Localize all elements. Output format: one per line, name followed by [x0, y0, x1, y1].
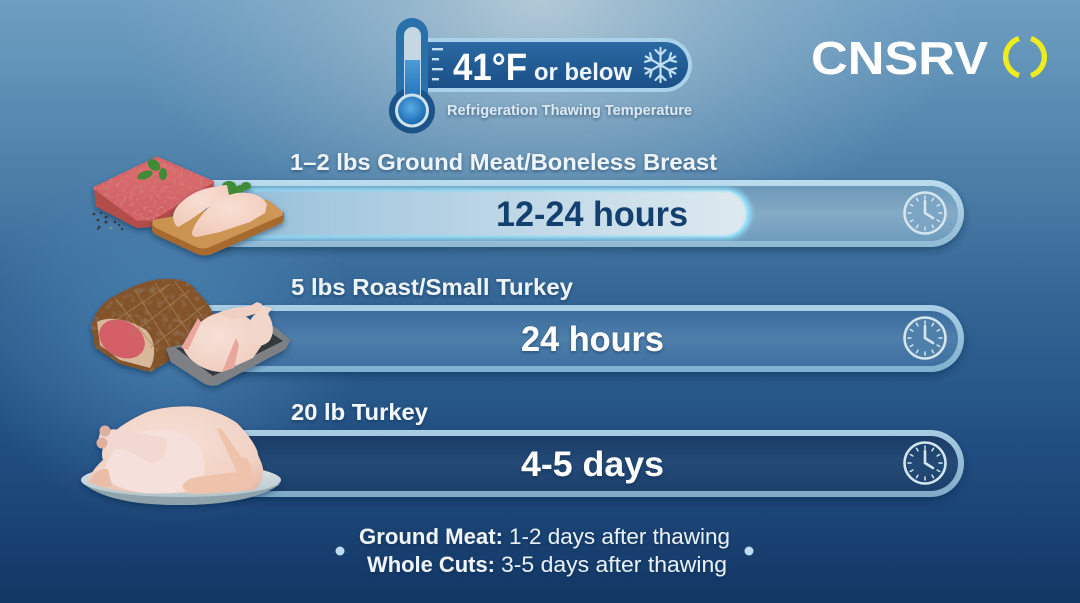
- icon: clock: [904, 442, 946, 484]
- temperature value: 41°F: [453, 47, 527, 89]
- note line 2: 3-5 days after thawing: [501, 552, 727, 577]
- chicken breasts: [173, 185, 229, 227]
- row 3 time bar: [235, 430, 964, 497]
- roast twine: [113, 282, 205, 352]
- thermometer tick marks: [432, 48, 443, 80]
- turkey thigh and leg: [105, 430, 205, 494]
- icon: tied roast: [92, 280, 212, 371]
- icon: turkey on plate: [81, 406, 281, 505]
- temperature pill: [412, 38, 692, 92]
- logo: CNSRV: [811, 32, 1044, 84]
- icon: thermometer: [389, 18, 435, 134]
- row 1: ground meat and boneless breast: [93, 149, 964, 256]
- small chicken: [181, 302, 273, 372]
- note line 2: Whole Cuts:: [367, 552, 495, 577]
- row 3 heading: 20 lb Turkey: [291, 399, 428, 425]
- roast cut face: [97, 319, 154, 368]
- icon: snowflake: [643, 48, 678, 82]
- icon: chicken in tray: [166, 302, 290, 386]
- logo brackets: [1006, 38, 1044, 76]
- row 2: roast and small turkey: [92, 274, 964, 386]
- logo wordmark: CNSRV: [811, 32, 988, 84]
- peppercorns: [93, 212, 123, 230]
- parsley on chicken: [222, 181, 251, 197]
- note bullet right: [744, 546, 754, 556]
- icon: clock: [904, 192, 946, 234]
- note line 1: [359, 524, 730, 549]
- row 1 heading: 1–2 lbs Ground Meat/Boneless Breast: [290, 149, 717, 175]
- storage note: [336, 524, 754, 577]
- temperature caption: Refrigeration Thawing Temperature: [447, 102, 692, 119]
- row 2 time bar: [205, 305, 964, 372]
- icon: clock: [904, 318, 946, 358]
- note line 2: [367, 552, 727, 577]
- icon: ground meat: [95, 157, 213, 227]
- turkey wing: [183, 428, 253, 494]
- row 3: 20 lb turkey: [81, 399, 964, 505]
- note bullet left: [336, 546, 344, 556]
- temperature badge: [389, 18, 692, 134]
- row 2 duration: 24 hours: [521, 320, 664, 359]
- row 1 time bar: [212, 180, 964, 247]
- temperature qualifier: or below: [534, 59, 632, 86]
- parsley on meat: [136, 157, 167, 181]
- row 1 duration: 12-24 hours: [496, 195, 688, 234]
- row 3 duration: 4-5 days: [521, 445, 664, 484]
- icon: cutting board with chicken breasts: [152, 181, 284, 256]
- turkey body: [88, 406, 263, 493]
- note line 1: Ground Meat:: [359, 524, 503, 549]
- plate: [81, 463, 281, 505]
- note line 1: 1-2 days after thawing: [509, 524, 730, 549]
- row 2 heading: 5 lbs Roast/Small Turkey: [291, 274, 573, 300]
